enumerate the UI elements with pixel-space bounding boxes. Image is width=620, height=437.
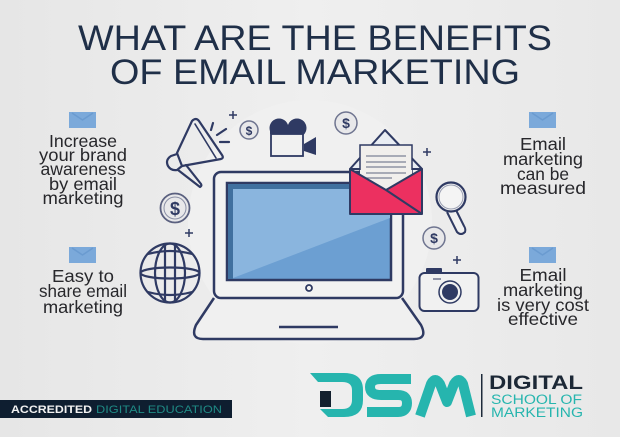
text: increase brand awareness: by email xyxy=(49,174,117,194)
title: WHAT ARE THE BENEFITS xyxy=(78,19,552,58)
text: can be measured: Email xyxy=(520,134,566,154)
icon: film camera xyxy=(270,118,316,156)
logo mark: D xyxy=(310,373,363,417)
text: easy to share: marketing xyxy=(43,297,123,317)
icon: magnifying glass xyxy=(436,182,466,234)
text: cost effective: effective xyxy=(508,309,578,329)
title xyxy=(78,19,552,92)
icon: coins xyxy=(160,112,445,249)
icon: megaphone xyxy=(167,119,229,187)
logo text: MARKETING xyxy=(491,405,583,420)
benefit: brand awareness xyxy=(39,112,127,208)
icon: plus signs xyxy=(185,111,461,264)
text: can be measured: marketing xyxy=(503,149,583,169)
laptop base xyxy=(194,298,423,339)
icon: photo camera xyxy=(420,268,478,311)
benefit: cost effective xyxy=(497,247,589,329)
text: increase brand awareness: your brand xyxy=(39,145,127,165)
title: OF EMAIL MARKETING xyxy=(110,53,520,92)
banner: accredited digital education xyxy=(0,400,232,418)
text: easy to share: share email xyxy=(39,281,127,301)
webcam dot xyxy=(306,285,312,291)
text: cost effective xyxy=(497,265,589,329)
icon: coins: $ xyxy=(430,230,438,246)
text: can be measured xyxy=(500,134,586,198)
icon: mail xyxy=(69,247,96,263)
text: can be measured: measured xyxy=(500,178,586,198)
icon: mail xyxy=(69,112,96,128)
text: can be measured: can be xyxy=(517,164,569,184)
text: easy to share xyxy=(39,266,127,317)
text: cost effective: Email xyxy=(520,265,566,285)
logo mark: S xyxy=(367,379,411,412)
logo text: SCHOOL OF xyxy=(491,392,582,407)
icon: mail xyxy=(529,247,556,263)
text: increase brand awareness: marketing xyxy=(42,188,124,208)
benefit: easy to share xyxy=(39,247,127,317)
banner: accredited digital education: ACCREDITED xyxy=(11,404,92,416)
banner: accredited digital education: DIGITAL EDUCATION xyxy=(96,404,222,416)
text: cost effective: is very cost xyxy=(497,295,589,315)
text: cost effective: marketing xyxy=(503,280,583,300)
icon: open envelope xyxy=(350,130,422,214)
icon: coins: $ xyxy=(246,124,253,138)
logo mark: M xyxy=(420,380,471,416)
benefit: measured xyxy=(500,112,586,198)
laptop xyxy=(194,172,423,339)
icon: globe xyxy=(140,244,200,302)
logo text xyxy=(489,373,583,420)
icon: mail xyxy=(529,112,556,128)
logo: DSM digital school of marketing xyxy=(310,373,583,420)
text: increase brand awareness: awareness xyxy=(40,159,126,179)
icon: coins: $ xyxy=(170,199,180,219)
icon: coins: $ xyxy=(342,115,350,131)
laptop screen xyxy=(227,183,391,280)
text: increase brand awareness xyxy=(39,131,127,208)
text: easy to share: Easy to xyxy=(52,266,114,286)
trackpad xyxy=(279,326,338,328)
logo text: DIGITAL xyxy=(489,373,583,394)
laptop lid xyxy=(214,172,403,298)
text: increase brand awareness: Increase xyxy=(49,131,117,151)
